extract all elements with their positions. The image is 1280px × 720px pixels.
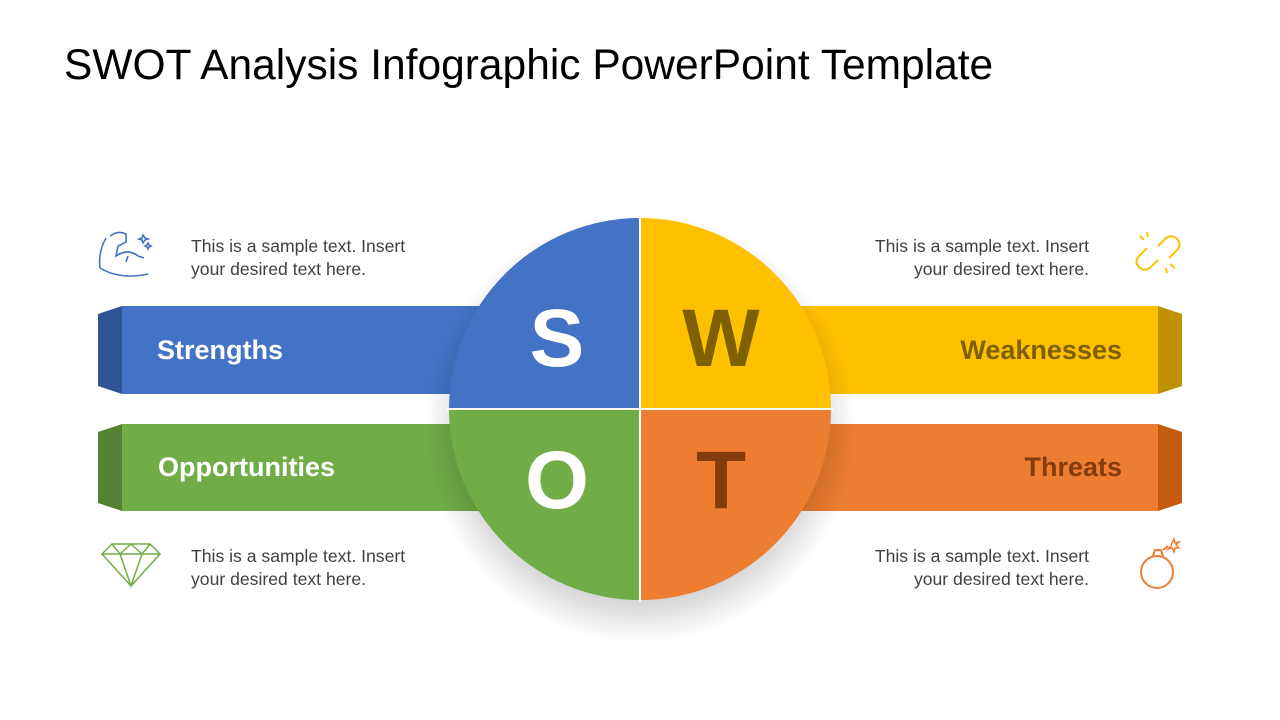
text: strengths: This is a sample text. Insert xyxy=(191,236,405,256)
label: weaknesses: Weaknesses xyxy=(960,335,1122,365)
icon: broken chain xyxy=(1136,232,1180,273)
text: weaknesses: your desired text here. xyxy=(914,259,1089,279)
bar: strengths xyxy=(98,306,482,394)
text: opportunities: This is a sample text. Insert xyxy=(191,546,405,566)
text: threats: This is a sample text. Insert xyxy=(875,546,1089,566)
circle: SWOT quadrants: S xyxy=(530,293,584,384)
bar: threats xyxy=(798,424,1182,511)
circle: SWOT quadrants: O xyxy=(525,435,589,526)
circle: SWOT quadrants: T xyxy=(696,435,746,526)
text: weaknesses: This is a sample text. Insert xyxy=(875,236,1089,256)
text: strengths xyxy=(191,236,405,279)
text: weaknesses xyxy=(875,236,1089,279)
title: SWOT Analysis Infographic PowerPoint Template xyxy=(64,42,993,89)
circle shadow xyxy=(425,213,855,643)
text: threats xyxy=(875,546,1089,589)
text: threats: your desired text here. xyxy=(914,569,1089,589)
bar: weaknesses xyxy=(798,306,1182,394)
label: strengths: Strengths xyxy=(157,335,283,365)
text: opportunities: your desired text here. xyxy=(191,569,366,589)
icon: bomb xyxy=(1141,539,1179,588)
label: threats: Threats xyxy=(1024,452,1122,482)
label: opportunities: Opportunities xyxy=(158,452,335,482)
text: strengths: your desired text here. xyxy=(191,259,366,279)
icon: diamond xyxy=(102,544,160,586)
bar: opportunities xyxy=(98,424,482,511)
circle: SWOT quadrants: W xyxy=(682,293,760,384)
text: opportunities xyxy=(191,546,405,589)
circle: SWOT quadrants xyxy=(447,216,833,602)
icon: muscle arm xyxy=(100,232,151,276)
